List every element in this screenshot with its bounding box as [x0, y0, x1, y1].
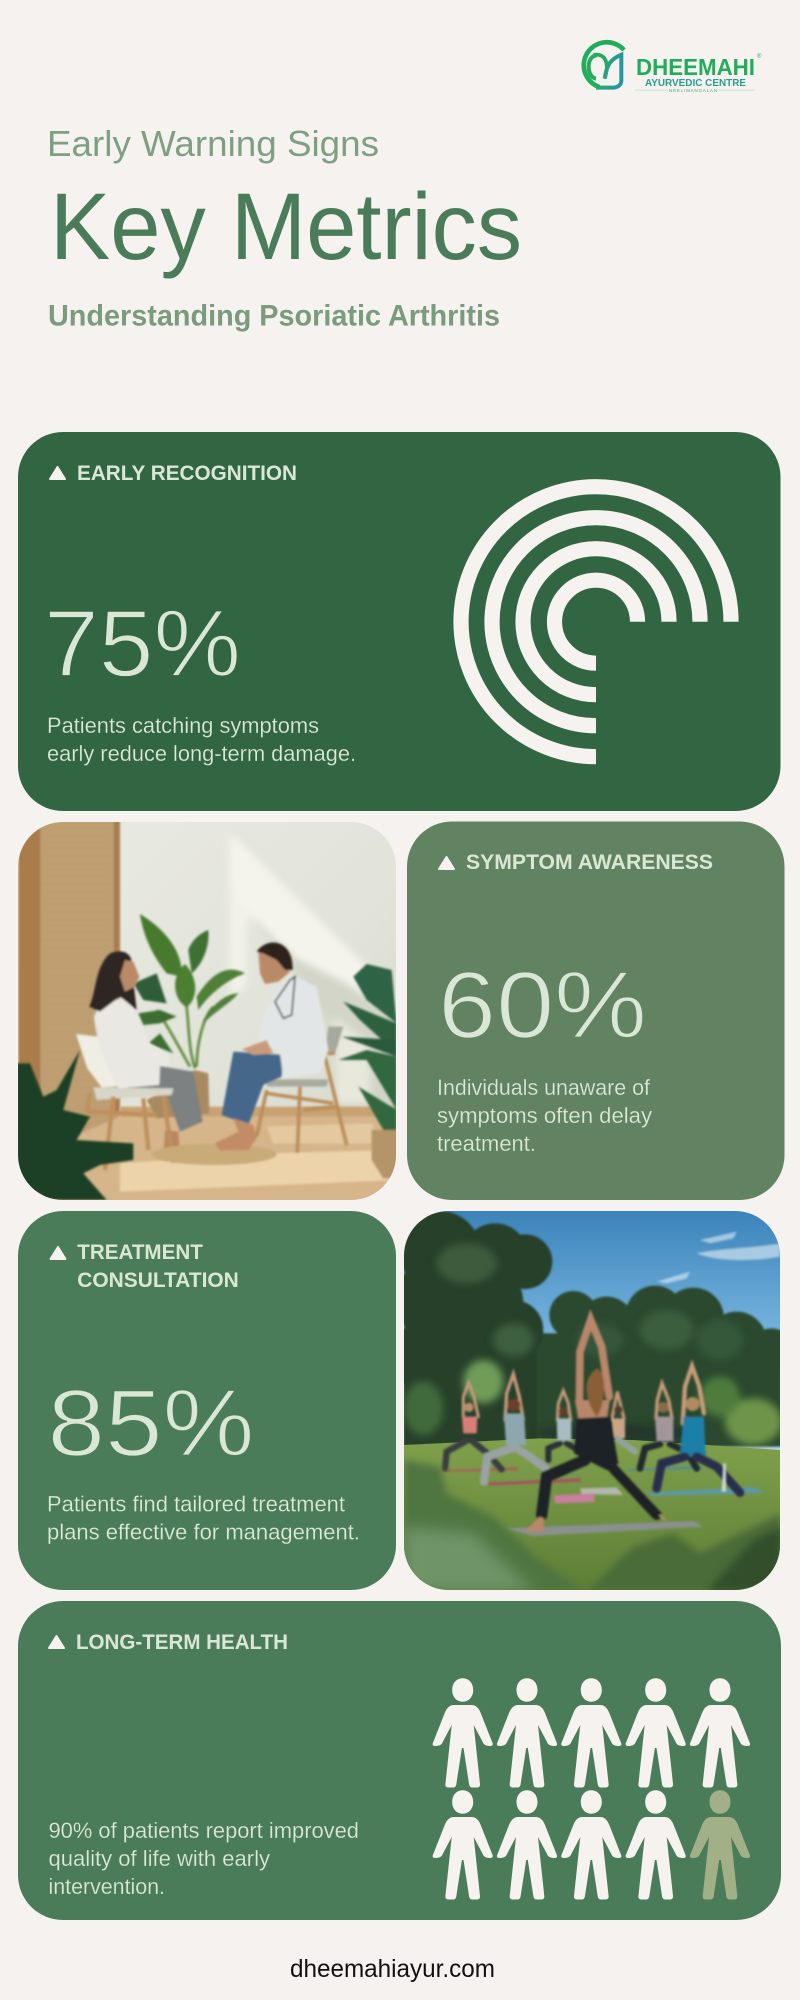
trees [393, 1211, 793, 1447]
background practitioners [445, 1366, 740, 1493]
logo mark [584, 42, 624, 88]
description: early reduce long-term damage. [47, 741, 356, 766]
right plant and basket [338, 964, 398, 1178]
heading [77, 1240, 239, 1292]
logo wordmark: DHEEMAHI [636, 54, 755, 80]
bamboo blind [18, 820, 120, 1137]
heading: LONG-TERM HEALTH [76, 1630, 288, 1654]
practitioner 5 [640, 1383, 697, 1468]
muted person [690, 1790, 750, 1900]
practitioner 4 [612, 1392, 635, 1452]
description [437, 1075, 652, 1156]
description [47, 1492, 360, 1544]
practitioner 6 [657, 1366, 740, 1493]
heading: TREATMENT [77, 1240, 203, 1264]
icon: triangle [49, 1636, 64, 1648]
photo: patient and doctor consultation [17, 820, 398, 1202]
patient [76, 951, 211, 1170]
heading: EARLY RECOGNITION [77, 461, 297, 485]
description [47, 713, 356, 766]
description: treatment. [437, 1131, 536, 1156]
title: Key Metrics [50, 174, 522, 280]
centre plant [133, 914, 245, 1118]
mat [151, 1144, 277, 1165]
icon: triangle [439, 857, 454, 869]
photo: group yoga in a park [393, 1210, 793, 1592]
description [48, 1818, 359, 1899]
heading: SYMPTOM AWARENESS [466, 850, 713, 874]
eyebrow heading: Early Warning Signs [47, 123, 379, 164]
practitioner 2 [484, 1374, 547, 1482]
description: Patients catching symptoms [47, 713, 319, 738]
subtitle: Understanding Psoriatic Arthritis [48, 300, 500, 332]
lawn [403, 1438, 780, 1592]
description: Individuals unaware of [437, 1075, 651, 1100]
logo location: NEELIMANGALAN [669, 88, 717, 93]
pictogram: 9 of 10 people [433, 1678, 750, 1900]
logo subtitle: AYURVEDIC CENTRE [645, 77, 746, 89]
description: symptoms often delay [437, 1103, 652, 1128]
panel: symptom awareness [407, 822, 784, 1200]
big number: 75% [44, 591, 241, 697]
doctor [215, 943, 347, 1153]
description: Patients find tailored treatment [47, 1492, 345, 1516]
logo location [635, 88, 755, 93]
icon: triangle [50, 1247, 66, 1259]
panel: long-term health [18, 1601, 781, 1920]
logo registered mark: ® [757, 53, 762, 60]
description: intervention. [48, 1874, 165, 1899]
practitioner 3 [548, 1391, 575, 1460]
concentric arcs graphic [461, 487, 731, 757]
floor [50, 1107, 397, 1202]
foreground foliage [403, 1460, 782, 1592]
description: 90% of patients report improved [48, 1818, 359, 1843]
heading: CONSULTATION [77, 1268, 239, 1292]
foreground plant [17, 1050, 133, 1200]
practitioner 1 [445, 1383, 502, 1469]
panel: treatment consultation [18, 1211, 396, 1590]
sunlight and shadow on wall [230, 833, 396, 1110]
logo: Dheemahi Ayurvedic Centre [584, 42, 762, 93]
footer website: dheemahiayur.com [290, 1955, 495, 1983]
panel: early recognition [18, 432, 780, 811]
description: quality of life with early [48, 1846, 270, 1871]
mats [432, 1466, 765, 1536]
big number: 85% [48, 1370, 254, 1476]
description: plans effective for management. [47, 1520, 360, 1544]
main practitioner [525, 1320, 726, 1532]
icon: triangle [50, 467, 65, 479]
big number: 60% [438, 952, 647, 1058]
